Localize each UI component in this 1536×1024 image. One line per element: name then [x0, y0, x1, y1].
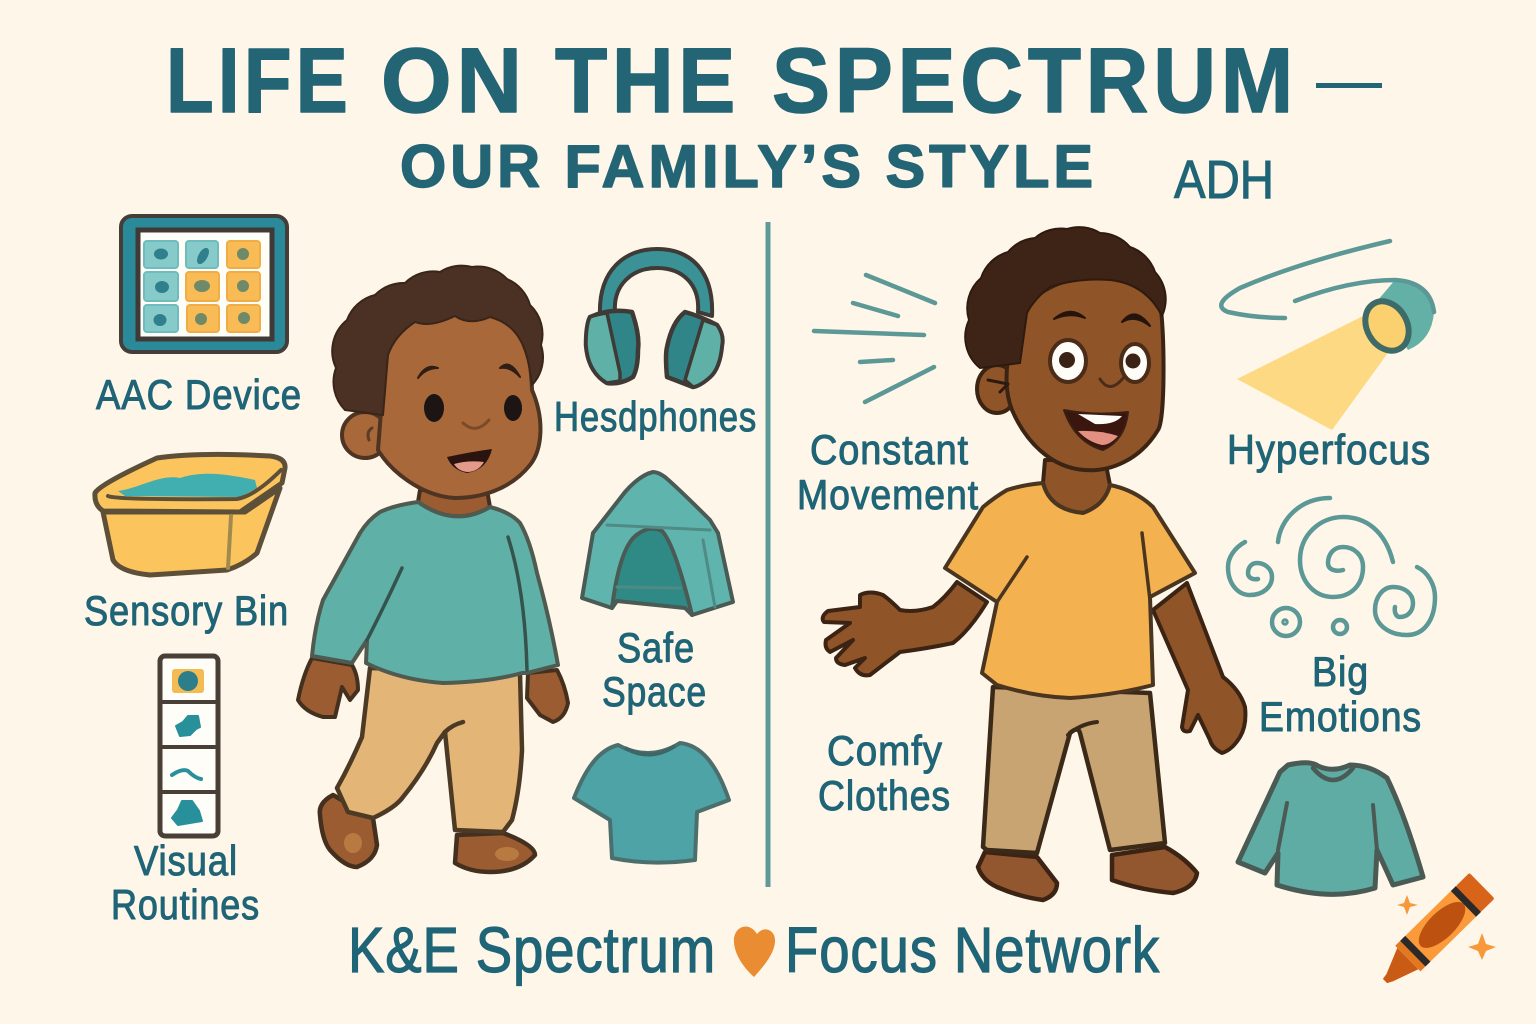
right shoe	[1112, 847, 1197, 893]
label: Visual Routines: Routines	[111, 881, 260, 928]
icon: visual routines strip	[160, 656, 218, 836]
icon: long-sleeve sweatshirt	[1238, 763, 1423, 894]
title: SPECTRUM	[772, 30, 1298, 132]
left arm and hand	[823, 582, 987, 675]
icon: safe space tent	[582, 472, 733, 615]
label: Safe Space: Space	[602, 668, 707, 715]
label: Comfy Clothes: Clothes	[818, 772, 951, 819]
icon: sensory bin	[95, 454, 285, 575]
label: Safe Space: Safe	[617, 624, 695, 671]
icon: constant movement lines	[814, 275, 935, 402]
title: THE	[555, 30, 740, 132]
character: ADHD child in yellow shirt	[823, 227, 1245, 900]
pants	[983, 687, 1165, 853]
title: ON	[381, 30, 527, 132]
teal sweater	[312, 502, 558, 683]
label: Hesdphones: Hesdphones	[554, 393, 757, 440]
label: AAC Device: AAC Device	[96, 371, 302, 418]
label: Big Emotions: Big	[1312, 648, 1369, 695]
face	[378, 305, 540, 498]
pants crotch fold	[445, 722, 463, 732]
icon: AAC device tablet	[121, 216, 287, 352]
footer text: K&E Spectrum: K&E Spectrum	[348, 914, 716, 986]
left shoe	[978, 852, 1057, 900]
face details	[988, 312, 1150, 450]
label: Visual Routines	[111, 837, 260, 928]
hair	[332, 266, 543, 415]
title: OUR FAMILY’S STYLE	[400, 133, 1097, 200]
icon: headphones	[586, 249, 722, 387]
label: Comfy Clothes	[818, 727, 951, 819]
hair	[965, 227, 1166, 368]
icon: t-shirt	[574, 743, 729, 863]
label: Safe Space	[602, 624, 707, 715]
shoe highlights	[344, 833, 519, 861]
icon: heart	[734, 926, 775, 977]
shirt sleeve folds	[997, 533, 1150, 602]
footer text: Focus Network: Focus Network	[785, 914, 1160, 986]
face details	[368, 365, 522, 473]
icon: crayon with sparkles	[1372, 873, 1496, 994]
ear	[342, 412, 388, 458]
label: Hyperfocus: Hyperfocus	[1227, 426, 1431, 473]
character: autistic child in teal sweater	[298, 266, 568, 872]
face	[1007, 275, 1164, 470]
label: Big Emotions: Emotions	[1259, 693, 1422, 740]
icon: hyperfocus flashlight	[1221, 241, 1434, 430]
heading fragment: ADH: ADH	[1174, 150, 1274, 210]
title	[166, 30, 1382, 200]
label: Sensory Bin: Sensory Bin	[84, 587, 289, 634]
neck	[1043, 460, 1110, 513]
neck	[418, 490, 490, 516]
label: Constant Movement: Constant	[810, 426, 969, 473]
title: LIFE	[166, 30, 352, 132]
yellow shirt	[945, 483, 1195, 698]
label: Comfy Clothes: Comfy	[827, 727, 943, 774]
label: Big Emotions	[1259, 648, 1422, 740]
right arm and hand	[1153, 583, 1245, 753]
left shoe	[320, 795, 377, 867]
divider	[766, 222, 770, 887]
pants crotch fold	[1068, 722, 1097, 735]
ear	[977, 365, 1017, 413]
right hand	[527, 670, 568, 722]
right shoe	[455, 833, 535, 872]
icon: big emotions swirls	[1228, 498, 1435, 636]
left hand	[298, 658, 358, 717]
label: Visual Routines: Visual	[134, 837, 238, 884]
label: Constant Movement: Movement	[797, 471, 979, 518]
pants	[337, 668, 522, 832]
label: Constant Movement	[797, 426, 979, 518]
sweater arm folds	[367, 537, 527, 670]
